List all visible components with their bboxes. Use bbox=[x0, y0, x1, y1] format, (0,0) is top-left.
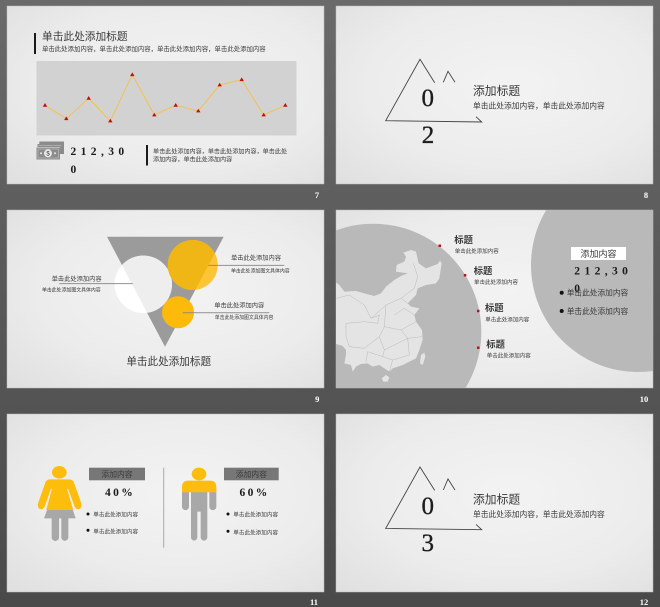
page number 10: 10 bbox=[640, 394, 648, 404]
callout right bottom: 单击此处添加内容 bbox=[214, 301, 264, 310]
panel: slide 9 triangle and circles bbox=[7, 210, 324, 388]
triangle bbox=[107, 237, 224, 347]
section number 02: 2 bbox=[422, 122, 434, 149]
bullet list: 单击此处添加内容 bbox=[567, 306, 629, 316]
figure 212,300 bbox=[70, 146, 129, 176]
large yellow circle bbox=[168, 240, 218, 290]
man bullets: 单击此处添加内容 bbox=[233, 511, 278, 519]
icon: man 60% bbox=[182, 468, 216, 541]
map of China bbox=[336, 250, 442, 382]
page number 8: 8 bbox=[644, 190, 648, 200]
icon: banknotes: $ bbox=[46, 152, 50, 158]
panel: slide 12 section bbox=[336, 414, 653, 592]
40 percent: 40% bbox=[105, 487, 135, 499]
callout right top: 单击此处添加内容 bbox=[231, 253, 281, 262]
grey circles bbox=[336, 210, 653, 388]
slide 7 subtitle: 单击此处添加内容，单击此处添加内容，单击此处添加内容，单击此处添加内容 bbox=[42, 44, 266, 53]
panel: slide 11 gender split bbox=[7, 414, 324, 592]
line chart bbox=[36, 61, 296, 136]
label 4 bbox=[486, 338, 531, 360]
icon: banknotes bbox=[36, 142, 64, 160]
section number 03: 0 bbox=[421, 493, 434, 520]
section subtitle: 单击此处添加内容，单击此处添加内容 bbox=[473, 100, 605, 110]
panel: slide 10 map bbox=[336, 210, 654, 388]
section number 03 bbox=[421, 493, 434, 557]
bullet list: 单击此处添加内容 bbox=[567, 288, 629, 298]
label 2 bbox=[474, 265, 519, 286]
icon: mountain outline bbox=[386, 59, 482, 122]
figure 212,300 bbox=[574, 266, 632, 295]
slide 7 heading: 单击此处添加标题 bbox=[42, 30, 128, 43]
figure 212,300: 0 bbox=[70, 164, 81, 176]
woman bullets bbox=[86, 511, 138, 535]
small yellow circle bbox=[162, 296, 194, 328]
section number 02: 0 bbox=[421, 85, 434, 112]
man description box bbox=[224, 468, 279, 480]
divider bbox=[163, 468, 164, 548]
label 1: 标题 bbox=[454, 234, 474, 245]
woman description box: 添加内容 bbox=[101, 469, 133, 479]
section heading: 添加标题 bbox=[473, 84, 520, 98]
label 3 bbox=[485, 302, 530, 323]
panel: slide 8 section bbox=[336, 6, 653, 184]
icon: mountain outline bbox=[386, 467, 482, 530]
callout right top: 单击此处添加图文具体内容 bbox=[231, 268, 290, 275]
figure 212,300: 212,30 bbox=[70, 146, 129, 158]
callout right top bbox=[208, 253, 290, 275]
white label box: 添加内容 bbox=[580, 248, 617, 259]
section subtitle: 单击此处添加内容，单击此处添加内容 bbox=[473, 509, 605, 519]
callout right bottom bbox=[183, 301, 273, 321]
page number 11: 11 bbox=[310, 597, 318, 607]
label 3: 单击此处添加内容 bbox=[485, 315, 530, 323]
white label box bbox=[571, 247, 626, 260]
text accent bar bbox=[146, 145, 148, 166]
figure 212,300: 212,30 bbox=[574, 266, 632, 278]
section number 02 bbox=[421, 85, 434, 149]
callout left: 单击此处添加内容 bbox=[52, 274, 102, 283]
slide 9 heading: 单击此处添加标题 bbox=[126, 355, 211, 368]
icon: woman 40% bbox=[38, 466, 81, 541]
slide 7 body text: 单击此处添加内容，单击此处添加内容，单击此处 bbox=[153, 148, 287, 156]
label 1: 单击此处添加内容 bbox=[455, 247, 499, 255]
woman description box bbox=[89, 468, 145, 480]
label 1 bbox=[454, 234, 499, 255]
label 2: 单击此处添加内容 bbox=[474, 278, 519, 286]
callout left: 单击此处添加图文具体内容 bbox=[42, 286, 101, 294]
figure 212,300: 0 bbox=[574, 283, 584, 295]
page number 9: 9 bbox=[315, 394, 319, 404]
bullet list bbox=[560, 288, 629, 316]
label 4: 标题 bbox=[486, 338, 506, 350]
section heading: 添加标题 bbox=[473, 492, 520, 506]
page number 12: 12 bbox=[640, 597, 648, 607]
man bullets: 单击此处添加内容 bbox=[233, 528, 278, 536]
label 3: 标题 bbox=[485, 302, 504, 313]
label 4: 单击此处添加内容 bbox=[487, 352, 531, 360]
slide 7 body text: 添加内容，单击此处添加内容 bbox=[153, 156, 232, 164]
callout left bbox=[42, 274, 133, 294]
woman bullets: 单击此处添加内容 bbox=[93, 527, 138, 535]
man bullets bbox=[226, 511, 278, 536]
man description box: 添加内容 bbox=[236, 469, 267, 479]
red marker dots bbox=[438, 244, 480, 349]
slide 7 body text bbox=[153, 148, 287, 164]
callout right bottom: 单击此处添加图文具体内容 bbox=[215, 314, 273, 321]
panel: slide 7 line chart bbox=[7, 6, 324, 184]
white circle bbox=[115, 256, 172, 313]
60 percent: 60% bbox=[240, 487, 270, 499]
woman bullets: 单击此处添加内容 bbox=[93, 511, 138, 519]
title accent bar bbox=[34, 33, 36, 54]
page number 7: 7 bbox=[315, 190, 320, 200]
label 2: 标题 bbox=[474, 265, 493, 276]
section number 03: 3 bbox=[421, 530, 434, 557]
